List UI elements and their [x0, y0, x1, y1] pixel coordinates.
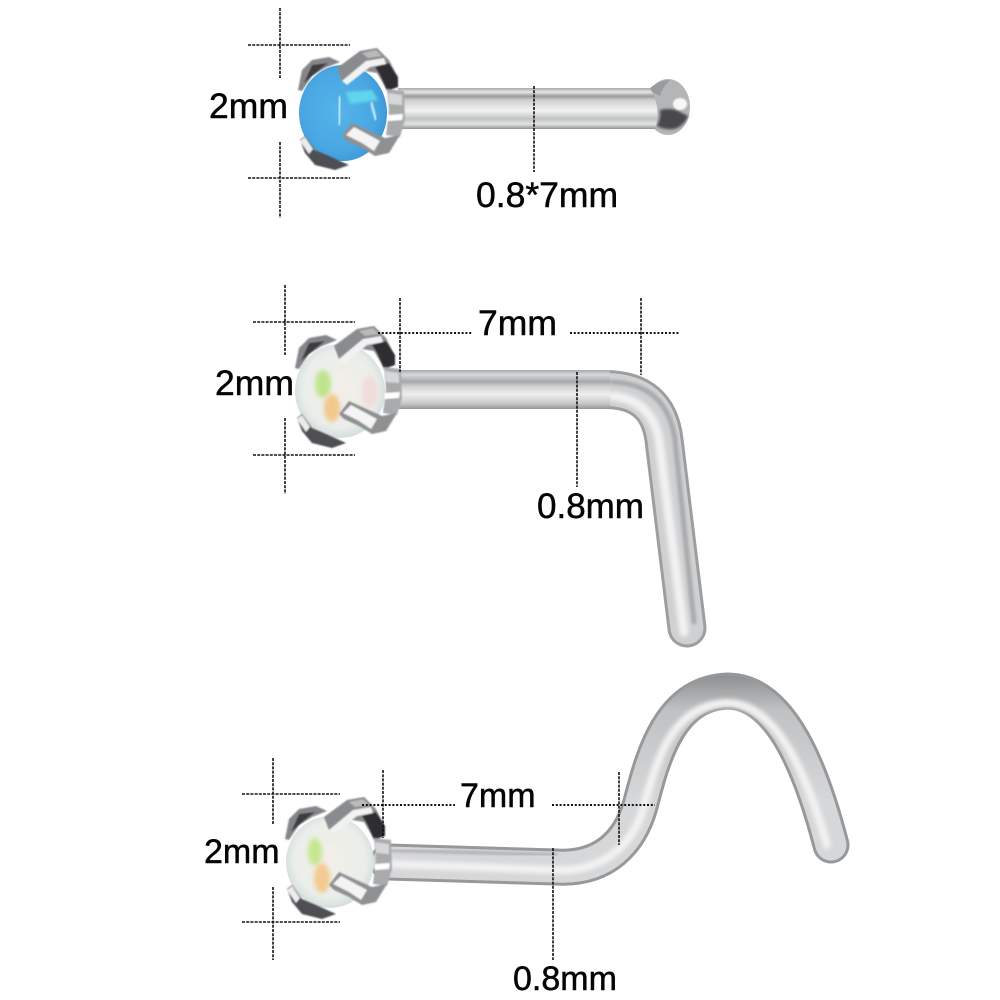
label: 2mm: 2mm — [209, 86, 288, 126]
size dimension lines: 2mm — [253, 285, 355, 494]
label: 2mm: 2mm — [215, 363, 294, 403]
label: 7mm: 7mm — [478, 303, 557, 343]
label: 2mm: 2mm — [204, 833, 280, 871]
label: 0.8*7mm: 0.8*7mm — [476, 175, 618, 215]
panel: straight bone-end nose stud with blue opal — [209, 8, 690, 218]
panel: L-shaped nose stud with white opal — [215, 285, 694, 632]
label: 0.8mm: 0.8mm — [513, 960, 617, 998]
shaft dimension line — [533, 86, 535, 172]
label: 0.8mm: 0.8mm — [537, 487, 644, 526]
white opal stone — [285, 797, 392, 919]
blue opal stone — [298, 48, 405, 170]
size dimension lines: 2mm — [242, 758, 340, 960]
size dimension lines: 2mm — [248, 8, 350, 218]
length dimension lines: 7mm — [362, 770, 655, 845]
screw shaft — [388, 691, 831, 870]
ball end — [646, 79, 690, 135]
panel: screw-shaped nose stud with white opal — [204, 691, 831, 998]
length dimension lines: 7mm — [378, 298, 680, 375]
gauge dimension line — [576, 372, 578, 487]
L-bend shaft — [398, 370, 694, 632]
gauge dimension line — [552, 848, 554, 960]
label: 7mm: 7mm — [460, 777, 536, 815]
straight shaft — [398, 88, 658, 129]
white opal stone — [295, 326, 402, 448]
